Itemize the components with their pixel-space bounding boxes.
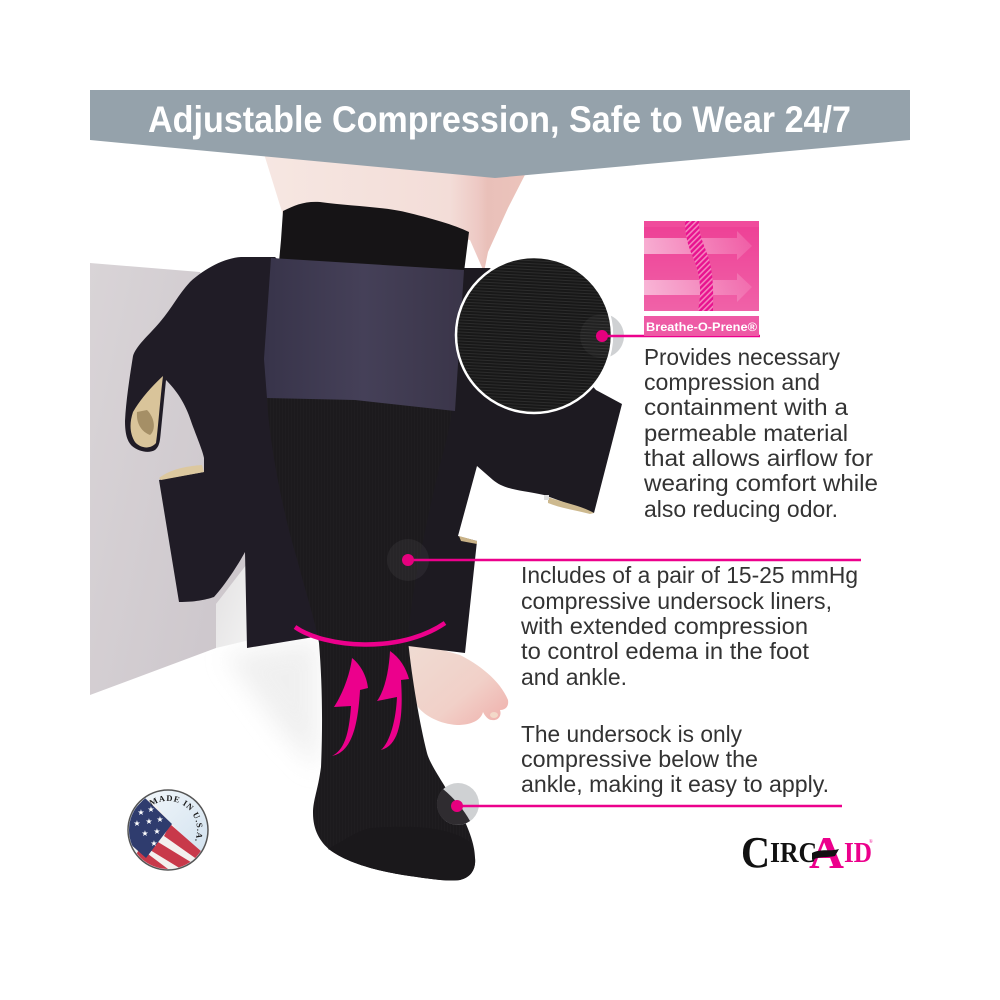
- airflow arrows: [644, 221, 759, 311]
- wrap: right panel and strap: [400, 268, 622, 653]
- toenail: [490, 712, 498, 718]
- buckle clip: [544, 495, 549, 500]
- inner curl: [137, 410, 154, 435]
- text: fabric description: containment with a: [644, 394, 849, 420]
- Made in USA seal: ★: [150, 839, 158, 848]
- CircAid logo: IRC: [770, 838, 817, 869]
- magnified fabric circle: [456, 257, 624, 413]
- rear foot: [408, 640, 508, 725]
- CircAid logo: C: [741, 828, 770, 877]
- badge label: Breathe-O-Prene®: [646, 322, 758, 334]
- title: Adjustable Compression, Safe to Wear 24/7: [148, 99, 851, 140]
- tan lining at right flap: [459, 536, 477, 544]
- CircAid logo: ®: [869, 839, 873, 845]
- tan lining at strap end: [548, 497, 594, 514]
- CircAid logo: [741, 827, 873, 878]
- text: fabric description: permeable material: [644, 420, 848, 446]
- callout hotspot: fabric: [580, 314, 624, 358]
- undersock with cuff: [267, 202, 475, 881]
- Made in USA seal: ★: [137, 808, 145, 817]
- callout line: fabric: [596, 330, 760, 342]
- callout: ankle: [437, 783, 842, 825]
- Breathe-O-Prene badge: [644, 221, 759, 336]
- compression curve: [295, 623, 445, 645]
- display box behind the leg: [90, 263, 250, 695]
- star field: [126, 798, 172, 858]
- Made in USA seal: ★: [153, 827, 161, 836]
- Made in USA seal: ★: [145, 817, 153, 826]
- text: undersock liners: to control edema in the foot: [521, 638, 809, 664]
- text: undersock compression: ankle, making it easy to apply.: [521, 771, 829, 797]
- Made in USA seal: ★: [147, 805, 155, 814]
- text: fabric description: [643, 344, 878, 522]
- text: undersock liners: [520, 562, 858, 690]
- text: fabric description: Provides necessary: [644, 344, 840, 370]
- text: undersock liners: compressive undersock liners,: [521, 588, 832, 614]
- text: undersock liners: Includes of a pair of 15-25 mmHg: [521, 562, 858, 588]
- upward arrows: [332, 651, 409, 756]
- seal text: MADE IN U.S.A.: [148, 795, 202, 841]
- Made in USA seal: ★: [141, 829, 149, 838]
- header banner: [90, 90, 910, 178]
- Made in USA seal: [127, 789, 209, 871]
- text: fabric description: compression and: [644, 369, 820, 395]
- fabric strand: [685, 221, 713, 311]
- text: undersock compression: The undersock is only: [521, 721, 742, 747]
- Made in USA seal: ★: [156, 815, 164, 824]
- text: fabric description: that allows airflow for: [644, 445, 873, 471]
- Made in USA seal: ★: [133, 819, 141, 828]
- tan lining at lower flap: [159, 465, 204, 480]
- callout hotspot: calf: [387, 539, 861, 581]
- CircAid logo: A: [809, 827, 844, 878]
- wrap: left panel with rolled end: [125, 257, 320, 648]
- flag stripes: [129, 798, 195, 869]
- text: undersock liners: and ankle.: [521, 664, 627, 690]
- thigh skin: [262, 150, 530, 272]
- text: undersock liners: with extended compression: [520, 613, 808, 639]
- CircAid logo: ID: [844, 838, 872, 869]
- rolled tan lining: [131, 376, 163, 447]
- text: fabric description: also reducing odor.: [644, 496, 838, 522]
- text: undersock compression: compressive below the: [521, 746, 758, 772]
- floor shadow: [225, 640, 318, 770]
- text: undersock compression: [521, 721, 829, 797]
- compression band: [264, 258, 464, 411]
- text: fabric description: wearing comfort while: [643, 470, 878, 496]
